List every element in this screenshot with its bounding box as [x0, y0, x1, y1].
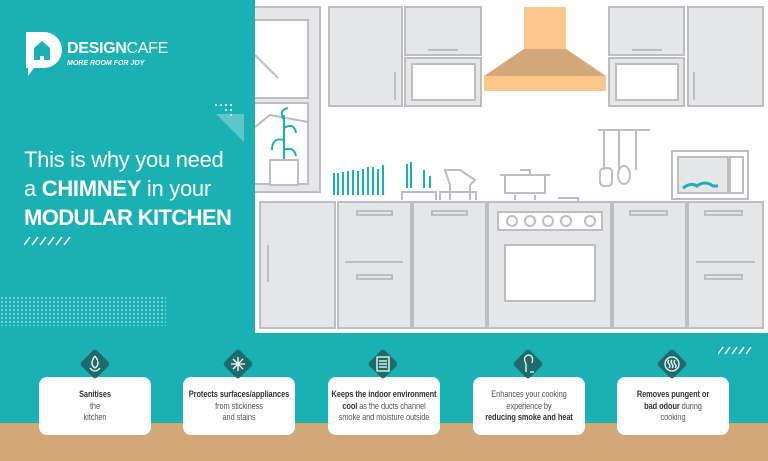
- card 5: cooking: [660, 412, 685, 423]
- card 3: cool as the ducts channel: [342, 400, 426, 412]
- card 1: kitchen: [84, 412, 106, 423]
- dot pattern: [0, 296, 166, 326]
- card 4: [473, 377, 585, 435]
- card 4: experience by: [506, 400, 552, 412]
- logo: [26, 32, 168, 76]
- stove knobs: [507, 216, 595, 226]
- title: [24, 147, 231, 230]
- card 2: and stains: [222, 412, 256, 423]
- card 4: Enhances your cooking: [491, 389, 567, 400]
- card 3: [328, 377, 440, 435]
- card 5: Removes pungent or: [637, 389, 709, 400]
- card 2: [183, 377, 295, 435]
- upper cabinets right: [609, 7, 763, 106]
- teal accents: [272, 108, 718, 195]
- background: tan floor: [0, 423, 768, 461]
- card 4: reducing smoke and heat: [485, 412, 573, 423]
- card 1: Sanitises: [79, 389, 111, 400]
- upper cabinets left: [329, 7, 481, 106]
- card 2: Protects surfaces/appliances: [189, 389, 289, 400]
- icon: diamonds: [80, 350, 686, 378]
- card 5: bad odour during: [644, 400, 702, 412]
- slashes: [24, 236, 70, 246]
- chimney hood: [484, 7, 606, 91]
- title: a CHIMNEY in your: [24, 176, 211, 201]
- title: MODULAR KITCHEN: [24, 205, 231, 230]
- card 1: [39, 377, 151, 435]
- pot, kettle, utensils: [402, 130, 650, 202]
- logo: MORE ROOM FOR JOY: [67, 60, 144, 67]
- base cabinets: [260, 202, 763, 328]
- logo: DESIGNCAFE: [67, 40, 168, 57]
- card 1: the: [90, 400, 100, 412]
- kitchen illustration: [255, 0, 768, 333]
- card 2: from stickiness: [215, 400, 263, 412]
- decorative triangle and dots: [215, 104, 244, 142]
- slashes right: [718, 346, 752, 354]
- window: [250, 7, 320, 192]
- card 5: [617, 377, 729, 435]
- microwave: [672, 151, 748, 199]
- card 3: Keeps the indoor environment: [332, 389, 436, 400]
- title: This is why you need: [24, 147, 223, 172]
- card 3: smoke and moisture outside: [339, 412, 429, 423]
